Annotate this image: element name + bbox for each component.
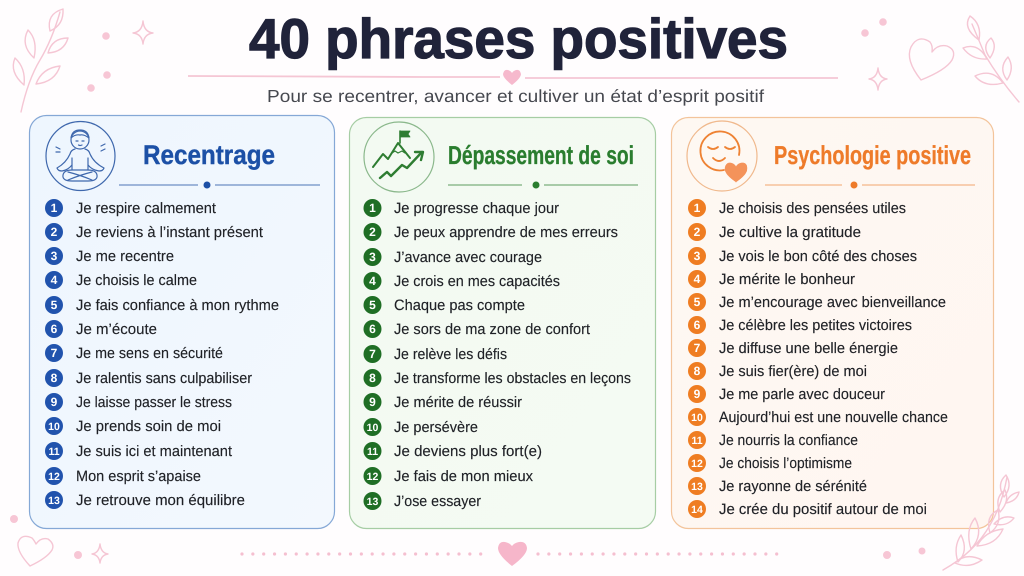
list: Recentrage phrases: 10 <box>48 421 60 433</box>
list: Psychologie positive phrases: Je choisis l’optimisme <box>719 455 852 472</box>
list: Psychologie positive phrases: Je m’encourage avec bienveillance <box>719 294 946 311</box>
title: 40 phrases positives <box>249 7 788 70</box>
list: Recentrage phrases: Je ralentis sans culpabiliser <box>76 370 252 387</box>
list: Dépassement phrases: J’avance avec courage <box>394 249 542 266</box>
list: Recentrage phrases <box>45 199 279 509</box>
list: Recentrage phrases: 2 <box>51 225 58 239</box>
list: Dépassement phrases: 3 <box>369 250 376 264</box>
list: Recentrage phrases: 3 <box>51 249 58 263</box>
list: Recentrage phrases: 8 <box>51 371 58 385</box>
decoration: bottom-right branch <box>943 475 1019 570</box>
title divider with heart <box>188 70 838 85</box>
list: Dépassement phrases: Je deviens plus fort(e) <box>394 443 542 460</box>
subtitle: Pour se recentrer, avancer et cultiver un état d’esprit positif <box>267 86 764 106</box>
list: Recentrage phrases: 9 <box>51 395 58 409</box>
list: Recentrage phrases: Je respire calmement <box>76 200 217 217</box>
list: Dépassement phrases: Je sors de ma zone de confort <box>394 321 591 338</box>
list: Dépassement phrases <box>364 199 631 510</box>
list: Dépassement phrases: 4 <box>369 274 376 288</box>
list: Dépassement phrases: Je transforme les obstacles en leçons <box>394 370 631 387</box>
list: Recentrage phrases: Je m’écoute <box>76 321 157 338</box>
list: Dépassement phrases: 12 <box>367 471 378 483</box>
list: Dépassement phrases: Je persévère <box>394 419 478 436</box>
list: Dépassement phrases: 6 <box>369 322 376 336</box>
list: Psychologie positive phrases: Je choisis des pensées utiles <box>719 200 906 217</box>
list: Psychologie positive phrases: 11 <box>691 435 703 447</box>
decoration: top-left dots and sparkle <box>87 21 153 92</box>
decoration: bottom-right dots <box>883 548 926 559</box>
list: Dépassement phrases: Je progresse chaque jour <box>394 200 559 217</box>
heading divider <box>119 182 320 188</box>
list: Dépassement phrases: 10 <box>367 422 378 434</box>
decoration: bottom dotted line with heart <box>242 542 784 566</box>
list: Recentrage phrases: 5 <box>51 298 58 312</box>
list: Recentrage phrases: 12 <box>48 471 60 483</box>
list: Psychologie positive phrases: Aujourd’hui est une nouvelle chance <box>719 409 948 426</box>
list: Recentrage phrases: Mon esprit s’apaise <box>76 468 201 485</box>
list: Psychologie positive phrases: 5 <box>694 295 701 309</box>
list: Psychologie positive phrases: 9 <box>694 387 701 401</box>
list: Psychologie positive phrases: 7 <box>694 341 701 355</box>
list: Psychologie positive phrases: 4 <box>694 272 701 286</box>
list: Psychologie positive phrases: Je rayonne de sérénité <box>719 478 867 495</box>
list: Recentrage phrases: 6 <box>51 322 58 336</box>
list: Psychologie positive phrases: Je vois le bon côté des choses <box>719 248 917 265</box>
list: Dépassement phrases: Je crois en mes capacités <box>394 273 560 290</box>
list: Psychologie positive phrases: 10 <box>691 412 703 424</box>
list: Dépassement phrases: Je relève les défis <box>394 346 507 363</box>
decoration: top-right branch <box>963 16 1019 102</box>
list: Dépassement phrases: 13 <box>367 496 378 508</box>
list: Recentrage phrases: 4 <box>51 273 58 287</box>
list: Recentrage phrases: Je me recentre <box>76 248 174 265</box>
list: Psychologie positive phrases: Je mérite le bonheur <box>719 271 855 288</box>
list: Dépassement phrases: 8 <box>369 371 376 385</box>
panel: Dépassement de soi <box>350 118 656 528</box>
list: Recentrage phrases: Je fais confiance à mon rythme <box>76 297 279 314</box>
list: Dépassement phrases: Je fais de mon mieux <box>394 468 533 485</box>
decoration: top-right dots, sparkle and heart <box>861 18 954 90</box>
list: Psychologie positive phrases: Je crée du positif autour de moi <box>719 501 927 518</box>
icon: meditating person <box>46 122 115 190</box>
list: Psychologie positive phrases: 14 <box>691 504 703 516</box>
list: Dépassement phrases: Je peux apprendre de mes erreurs <box>394 224 618 241</box>
list: Dépassement phrases: 2 <box>369 225 376 239</box>
list: Dépassement phrases: 1 <box>369 201 376 215</box>
list: Dépassement phrases: Je mérite de réussir <box>394 394 522 411</box>
icon: smiling face with heart <box>687 121 757 191</box>
list: Psychologie positive phrases: Je nourris la confiance <box>719 432 858 449</box>
heading divider <box>448 182 638 188</box>
list: Recentrage phrases: 13 <box>48 495 60 507</box>
list: Dépassement phrases: J’ose essayer <box>394 493 481 510</box>
list: Psychologie positive phrases: Je célèbre les petites victoires <box>719 317 912 334</box>
list: Psychologie positive phrases: Je cultive la gratitude <box>719 224 861 241</box>
list: Recentrage phrases: Je reviens à l’instant présent <box>76 224 264 241</box>
list: Psychologie positive phrases <box>688 199 948 518</box>
list: Dépassement phrases: 9 <box>369 395 376 409</box>
list: Psychologie positive phrases: Je suis fier(ère) de moi <box>719 363 867 380</box>
icon: mountain with flag and rising arrow <box>364 122 434 192</box>
panel: Psychologie positive <box>672 118 994 528</box>
list: Recentrage phrases: Je choisis le calme <box>76 272 197 289</box>
list: Recentrage phrases: Je prends soin de moi <box>76 418 221 435</box>
list: Psychologie positive phrases: 6 <box>694 318 701 332</box>
list: Recentrage phrases: Je me sens en sécurité <box>76 345 223 362</box>
decoration: top-left branch <box>13 9 68 112</box>
list: Psychologie positive phrases: Je me parle avec douceur <box>719 386 885 403</box>
list: Psychologie positive phrases: 2 <box>694 225 701 239</box>
panel: Recentrage <box>30 116 334 528</box>
list: Recentrage phrases: 7 <box>51 346 58 360</box>
list: Dépassement phrases: Chaque pas compte <box>394 297 525 314</box>
list: Recentrage phrases: 11 <box>48 446 60 458</box>
list: Dépassement phrases: 11 <box>367 446 378 458</box>
list: Recentrage phrases: Je retrouve mon équilibre <box>76 492 245 509</box>
list: Psychologie positive phrases: 13 <box>691 481 703 493</box>
decoration: bottom-left heart, dots and sparkle <box>10 515 108 566</box>
list: Psychologie positive phrases: 8 <box>694 364 701 378</box>
list: Psychologie positive phrases: 1 <box>694 201 701 215</box>
list: Recentrage phrases: 1 <box>51 201 58 215</box>
heading divider <box>765 182 975 188</box>
list: Recentrage phrases: Je suis ici et maintenant <box>76 443 233 460</box>
heading: Recentrage: Recentrage <box>143 140 275 170</box>
list: Dépassement phrases: 5 <box>369 298 376 312</box>
heading: Dépassement de soi: Dépassement de soi <box>448 140 634 170</box>
list: Recentrage phrases: Je laisse passer le stress <box>76 394 232 411</box>
list: Dépassement phrases: 7 <box>369 347 376 361</box>
list: Psychologie positive phrases: 12 <box>691 458 703 470</box>
list: Psychologie positive phrases: 3 <box>694 249 701 263</box>
list: Psychologie positive phrases: Je diffuse une belle énergie <box>719 340 898 357</box>
